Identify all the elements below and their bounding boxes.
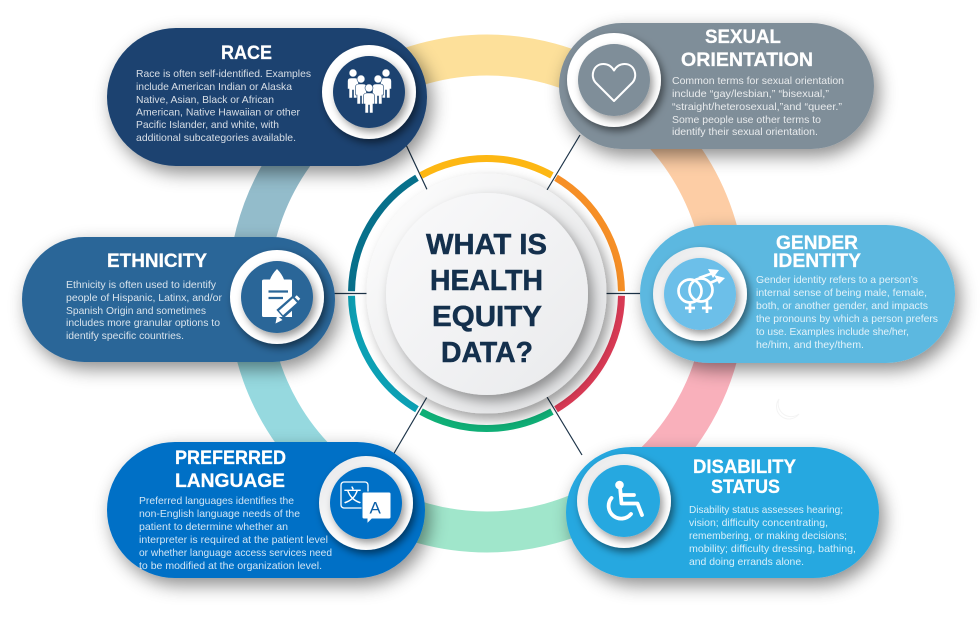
disability status text: Disability status assesses hearing; <box>689 505 843 516</box>
race text: include American Indian or Alaska <box>136 82 292 93</box>
icon: translation bubbles: A <box>370 498 382 518</box>
sexual orientation heading: SEXUAL <box>705 27 781 48</box>
icon: clipboard and pencil <box>230 250 324 344</box>
preferred language text: non-English language needs of the <box>139 509 300 520</box>
ethnicity text: Ethnicity is often used to identify <box>66 280 217 291</box>
preferred language heading <box>175 448 286 492</box>
preferred language text: patient to determine whether an <box>139 522 288 533</box>
ethnicity heading: ETHNICITY <box>107 251 207 272</box>
race text: Native, Asian, Black or African <box>136 95 274 106</box>
title: WHAT IS <box>426 229 547 261</box>
gender identity text: both, or another gender, and impacts <box>756 301 928 312</box>
gender identity text: he/him, and they/them. <box>756 340 864 351</box>
sexual orientation text: Some people use other terms to <box>672 115 821 126</box>
gender identity text: internal sense of being male, female, <box>756 288 927 299</box>
preferred language text: Preferred languages identifies the <box>139 496 294 507</box>
preferred language text: interpreter is required at the patient level <box>139 535 328 546</box>
icon: translation bubbles <box>319 456 413 550</box>
icon: group of people <box>322 45 416 139</box>
central inner disc <box>386 193 588 395</box>
preferred language text <box>139 496 332 572</box>
gender identity card background <box>640 225 955 363</box>
title: EQUITY <box>432 301 542 333</box>
disability status text: vision; difficulty concentrating, <box>689 518 828 529</box>
panel: gender identity <box>640 225 955 363</box>
gender identity heading: GENDER <box>776 233 858 254</box>
preferred language heading: PREFERRED <box>175 448 286 469</box>
preferred language card background <box>107 442 425 578</box>
icon: translation bubbles: 文 <box>344 482 362 508</box>
large pale ring <box>248 55 726 532</box>
gender identity text: to use. Examples include she/her, <box>756 327 909 338</box>
title: DATA? <box>441 337 533 369</box>
connector lines <box>330 132 645 455</box>
preferred language heading: LANGUAGE <box>175 471 285 492</box>
sexual orientation text: include “gay/lesbian,” “bisexual,” <box>672 89 830 100</box>
race text: Pacific Islander, and white, with <box>136 120 279 131</box>
panel: sexual orientation <box>559 23 874 149</box>
icon: linked gender symbols <box>653 247 747 341</box>
sexual orientation card background <box>559 23 874 149</box>
icon: heart <box>567 33 661 127</box>
panel: race <box>107 28 427 166</box>
ethnicity text <box>66 280 223 342</box>
segmented colour ring <box>352 159 621 428</box>
gender identity heading: IDENTITY <box>773 251 861 272</box>
disability status heading <box>693 457 796 498</box>
sexual orientation heading <box>681 27 813 71</box>
ethnicity card background <box>22 237 335 362</box>
race heading: RACE <box>221 43 272 64</box>
sexual orientation text <box>672 76 844 138</box>
icon: wheelchair <box>577 454 671 548</box>
race text: Race is often self-identified. Examples <box>136 69 311 80</box>
race card background <box>107 28 427 166</box>
sexual orientation text: Common terms for sexual orientation <box>672 76 844 87</box>
race text: additional subcategories available. <box>136 133 296 144</box>
ethnicity text: includes more granular options to <box>66 318 220 329</box>
disability status text: mobility; difficulty dressing, bathing, <box>689 544 856 555</box>
gender identity heading <box>773 233 861 272</box>
panel: ethnicity <box>22 237 335 362</box>
panel: disability status <box>566 447 879 578</box>
race text <box>136 69 311 144</box>
panel: preferred language <box>107 442 425 578</box>
gender identity text <box>756 275 938 351</box>
ethnicity text: people of Hispanic, Latinx, and/or <box>66 293 223 304</box>
gender identity text: the pronouns by which a person prefers <box>756 314 938 325</box>
central outer disc <box>366 174 606 414</box>
disability status text: and doing errands alone. <box>689 557 804 568</box>
faint crescent mark <box>777 399 799 419</box>
gender identity text: Gender identity refers to a person’s <box>756 275 918 286</box>
sexual orientation text: “straight/heterosexual,”and “queer.” <box>672 102 843 113</box>
preferred language text: or whether language access services need <box>139 548 332 559</box>
title <box>426 229 547 369</box>
disability status text <box>689 505 856 568</box>
disability status text: remembering, or making decisions; <box>689 531 847 542</box>
race text: American, Native Hawaiian or other <box>136 108 301 118</box>
disability status heading: DISABILITY <box>693 457 796 478</box>
title: HEALTH <box>430 265 543 297</box>
preferred language text: to be modified at the organization level. <box>139 561 322 572</box>
disability status heading: STATUS <box>711 477 780 498</box>
sexual orientation text: identify their sexual orientation. <box>672 127 818 138</box>
ethnicity text: identify specific countries. <box>66 331 184 342</box>
sexual orientation heading: ORIENTATION <box>681 50 813 71</box>
ethnicity text: Spanish Origin and sometimes <box>66 306 206 317</box>
disability status card background <box>566 447 879 578</box>
